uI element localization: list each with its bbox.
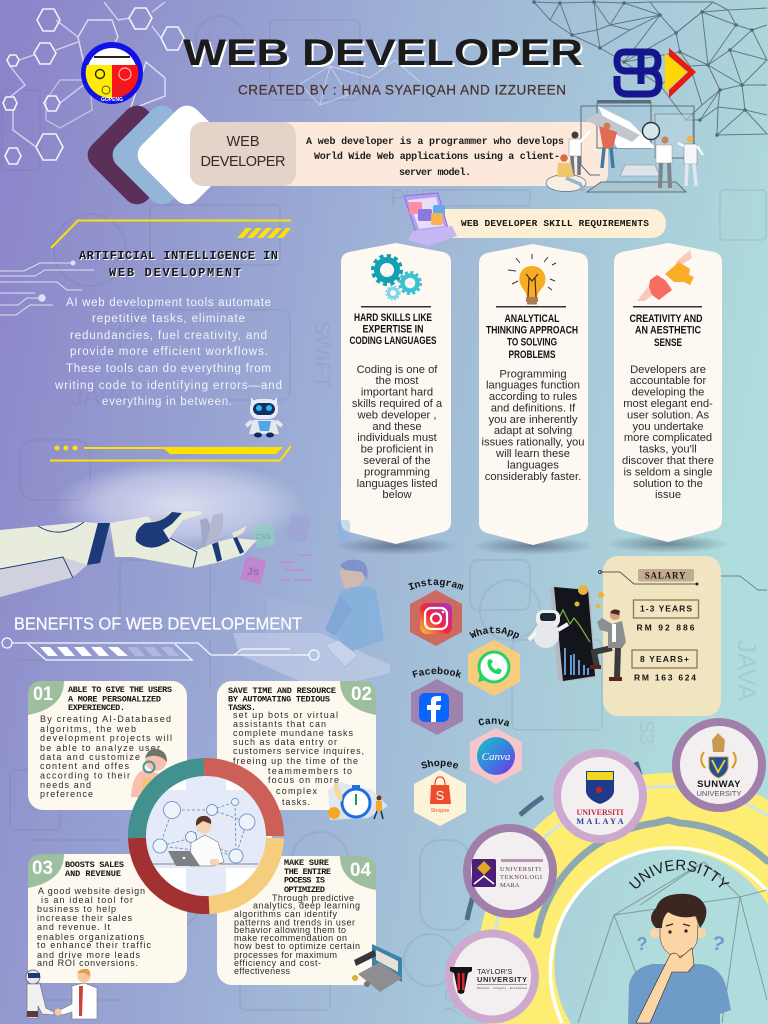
benefit body: according to their — [40, 770, 130, 780]
labels: social platforms — [408, 578, 519, 768]
benefit heading: MAKE SURE — [284, 858, 329, 868]
heading — [79, 249, 279, 281]
benefit body: business to help — [37, 904, 116, 914]
badge: sunway university: SUNWAY — [697, 779, 741, 790]
decoration: benefits tech underline — [2, 638, 319, 660]
icon: shopee hexagon: Shopee — [431, 808, 449, 814]
illustration: team building website — [546, 100, 703, 192]
benefit body: set up bots or virtual — [233, 710, 338, 720]
benefit body: behavior allowing them to — [234, 925, 346, 935]
body text: AI web development tools automate — [66, 297, 271, 309]
benefit body: freeing up the time of the — [233, 756, 358, 766]
icon: whatsapp hexagon — [468, 640, 520, 696]
body text: redundancies, fuel creativity, and — [70, 330, 267, 342]
heading box: WEB — [226, 134, 260, 150]
labels: social platforms: Canva — [478, 718, 509, 726]
icon: js tile — [240, 556, 267, 584]
benefit body: customers service inquires, — [233, 746, 364, 756]
logo: school crest: GOPENG — [101, 97, 123, 103]
heading: ARTIFICIAL INTELLIGENCE IN — [80, 250, 279, 264]
card body: languages listed — [357, 478, 437, 490]
icon: css tile: CSS — [255, 532, 271, 541]
card body: the most — [376, 375, 419, 387]
benefit body: teammembers to — [268, 766, 352, 776]
badge: universiti malaya: UNIVERSITI — [576, 808, 624, 817]
chart: university rings — [467, 762, 768, 1024]
labels: social platforms: Facebook — [412, 666, 462, 678]
illustration: developer at desk — [233, 514, 390, 690]
card body: programming — [364, 466, 430, 478]
body text: writing code to identifying errors—and — [54, 380, 282, 392]
benefit body: data and customize — [40, 752, 140, 762]
benefit body: increase their sales — [37, 913, 132, 923]
decoration: network mesh top right — [534, 2, 767, 135]
logo: SB with arrow — [617, 48, 696, 98]
labels: social platforms: Shopee — [421, 760, 458, 768]
number badge 01 — [28, 681, 64, 715]
benefit body: algoritms, the web — [40, 724, 136, 734]
number badge 04: 04 — [350, 860, 371, 881]
panel: benefit 03 — [26, 854, 187, 1019]
badge: universiti teknologi mara: MARA — [500, 882, 520, 889]
card heading: AN AESTHETIC — [635, 324, 701, 336]
salary row 2: 8 YEARS+ — [640, 654, 689, 664]
body text — [54, 297, 282, 408]
icon: js tile: Js — [247, 566, 259, 578]
card body: adapt at solving — [494, 425, 572, 437]
icon: gears — [373, 256, 420, 300]
badge: universiti teknologi mara: UNIVERSITI — [500, 866, 541, 873]
card body: issue — [655, 489, 681, 501]
benefit body: be able to analyze user — [40, 743, 160, 753]
heading box — [190, 122, 296, 186]
benefit heading — [228, 686, 336, 713]
card body: is seldom a single — [624, 466, 712, 478]
benefit body: needs and — [40, 780, 91, 790]
card body — [481, 368, 585, 483]
benefit heading — [68, 685, 172, 713]
icon: stacked diamonds — [82, 100, 242, 210]
card body: tasks, you'll — [639, 444, 697, 456]
number badge 04 — [340, 856, 376, 890]
card body: Coding is one of — [357, 364, 438, 376]
card body: be proficient in — [361, 444, 433, 456]
heading: WEB DEVELOPMENT — [110, 267, 242, 281]
panel: intro banner — [82, 100, 608, 210]
icon: shopee hexagon: S — [436, 788, 445, 803]
card body: more complicated — [624, 432, 712, 444]
body text: everything in between. — [102, 396, 232, 408]
tech bubbles — [153, 798, 255, 863]
ring segments — [137, 767, 275, 905]
benefit body: and drive more leads — [37, 950, 140, 960]
card heading: CREATIVITY AND — [630, 313, 703, 325]
panel: salary — [598, 556, 767, 716]
benefit body: A good website design — [38, 886, 145, 896]
number badge 03 — [28, 854, 64, 888]
badge: taylor's university: Wisdom · Integrity · Excellence — [477, 986, 527, 990]
badge: universiti malaya: MALAYA — [576, 817, 624, 826]
benefit body — [40, 714, 172, 799]
benefit heading: POCESS IS — [284, 876, 325, 886]
card body: languages — [507, 460, 559, 472]
card body: several of the — [363, 455, 431, 467]
description — [306, 136, 564, 179]
badge: sunway university — [676, 722, 762, 808]
card body: according to rules — [489, 391, 578, 403]
benefit body: such as data entry or — [233, 737, 337, 747]
benefit body: algorithms can identify — [234, 909, 338, 919]
card body: Developers are — [630, 364, 706, 376]
card body: discover that there — [622, 455, 714, 467]
heading: WEB DEVELOPMENT — [109, 266, 241, 280]
badge: taylor's university — [449, 934, 535, 1020]
benefit body: assistants that can — [233, 719, 326, 729]
card body: will learn these — [495, 448, 570, 460]
card heading — [486, 313, 578, 361]
card heading: HARD SKILLS LIKE — [354, 312, 432, 324]
benefit body: and ROI conversions. — [37, 958, 138, 968]
number badge 03: 03 — [32, 858, 53, 879]
label: university curved: UNIVERSITTY — [628, 860, 730, 888]
card body: Programming — [499, 368, 567, 380]
benefit body — [37, 886, 152, 968]
card body: and these — [372, 421, 422, 433]
icon: puzzle pieces — [637, 250, 694, 301]
badge: taylor's university: TAYLOR'S — [477, 967, 512, 976]
card body: issues rationally, you — [481, 436, 585, 448]
benefit body: development projects will — [40, 733, 172, 743]
logo: school crest — [81, 42, 143, 104]
card body: and definitions. If — [491, 402, 576, 414]
card body: individuals must — [357, 432, 438, 444]
card body: you are inherently — [489, 414, 578, 426]
benefit body: content and offes — [40, 761, 130, 771]
yellow frame bottom — [50, 446, 291, 460]
number badge 02: 02 — [351, 684, 372, 705]
card heading — [350, 312, 436, 347]
skill requirements pill: WEB DEVELOPER SKILL REQUIREMENTS — [461, 218, 649, 229]
figure: man in lab coat — [678, 136, 703, 186]
heading: ARTIFICIAL INTELLIGENCE IN — [79, 249, 278, 263]
description: A web developer is a programmer who develops — [306, 136, 564, 148]
subtitle: authors: CREATED BY : HANA SYAFIQAH AND IZZUREEN — [238, 82, 566, 98]
card body: user solution. As — [627, 410, 709, 422]
benefit heading: A MORE PERSONALIZED — [68, 694, 161, 704]
benefit body: analytics, deep learning — [253, 900, 360, 910]
benefit body: is an ideal tool for — [41, 895, 133, 905]
salary row 1: RM 92 886 — [636, 622, 695, 632]
card heading: EXPERTISE IN — [362, 324, 424, 336]
benefit heading: AND REVENUE — [65, 869, 121, 879]
icon: instagram hexagon — [410, 590, 462, 646]
benefit heading: BOOSTS SALES — [65, 860, 124, 870]
panel: benefit 01 — [28, 681, 187, 810]
card heading: ANALYTICAL — [504, 313, 560, 325]
card heading: SENSE — [654, 337, 682, 349]
number badge 01: 01 — [33, 684, 53, 705]
card body: skills required of a — [352, 398, 443, 410]
description: World Wide Web applications using a client- — [314, 151, 560, 163]
labels: social platforms: WhatsApp — [469, 626, 519, 640]
decoration: mesh in circle — [578, 862, 767, 1023]
panel: benefit 02 — [217, 681, 388, 820]
benefit heading: EXPERIENCED. — [68, 703, 125, 713]
body text: These tools can do everything from — [66, 363, 271, 375]
title: WEB DEVELOPER — [185, 34, 585, 75]
benefit body — [234, 893, 360, 976]
number badge 02 — [340, 681, 376, 715]
figure: woman in red — [599, 122, 617, 168]
benefit heading: BY AUTOMATING TEDIOUS — [228, 694, 330, 704]
panel: artificial intelligence — [50, 220, 291, 460]
benefit heading: THE ENTIRE — [284, 867, 331, 877]
icon: shopee hexagon — [414, 770, 466, 826]
background watermark icons: JAVA — [70, 381, 132, 411]
body text: provide more efficient workflows. — [70, 346, 268, 358]
benefit heading: TASKS. — [228, 703, 256, 713]
card body: below — [382, 489, 413, 501]
background watermark icons: JAVA — [732, 640, 762, 702]
benefit body: preference — [40, 789, 93, 799]
card body: web developer , — [356, 410, 436, 422]
benefit body: enables organizations — [37, 932, 144, 942]
icon: isometric laptop and router — [352, 944, 402, 992]
card heading: PROBLEMS — [508, 349, 556, 361]
description: server model. — [399, 167, 471, 179]
illustration: robot arm — [0, 511, 257, 597]
illustration: thinking man: ? — [710, 932, 727, 956]
robot — [529, 610, 568, 648]
card body: considerably faster. — [485, 471, 581, 483]
card heading — [630, 313, 703, 349]
decoration: glow behind hand — [55, 460, 305, 550]
icon: canva hexagon — [470, 728, 522, 784]
mesh nodes — [532, 0, 754, 137]
banner body — [190, 122, 608, 186]
badge: universiti malaya — [557, 753, 643, 839]
badge: universiti teknologi mara: TEKNOLOGI — [500, 874, 542, 881]
icon: canva hexagon: Canva — [482, 751, 511, 763]
benefit body: complete mundane tasks — [233, 728, 354, 738]
labels: social platforms: Instagram — [408, 578, 464, 590]
background watermark icons: PHP — [390, 185, 435, 210]
figure: man with raised arm — [569, 131, 590, 175]
illustration: thinking man — [628, 894, 731, 1024]
card body: languages function — [486, 380, 580, 392]
benefit body: how best to optimize certain — [234, 941, 360, 951]
title: WEB DEVELOPER — [183, 32, 583, 73]
body text: repetitive tasks, eliminate — [92, 313, 245, 325]
illustration: thinking man: ? — [636, 934, 648, 954]
background watermark icons: RUBY — [440, 960, 462, 1016]
benefit body: focus on more — [268, 775, 339, 785]
benefit body: efficiency and cost- — [234, 958, 321, 968]
card body — [352, 364, 443, 501]
salary heading — [638, 569, 694, 582]
icon: stopwatch with coins — [328, 782, 388, 820]
chart: centre ring with developer — [137, 767, 275, 905]
benefit heading: OPTIMIZED — [284, 885, 325, 895]
benefit heading — [65, 860, 124, 879]
salary row 2 — [632, 650, 697, 682]
faint triangle mesh under title — [300, 60, 420, 105]
decoration: circuit lines left — [0, 261, 94, 315]
icon: small robot — [246, 397, 282, 438]
benefit heading — [284, 858, 331, 895]
salary row 2: RM 163 624 — [634, 672, 696, 682]
card heading: TO SOLVING — [507, 336, 557, 348]
badge: sunway university: UNIVERSITY — [696, 789, 742, 798]
benefit body — [233, 710, 364, 807]
card body: you undertake — [633, 421, 703, 433]
salary row 1 — [634, 600, 698, 632]
panel: creativity — [606, 243, 730, 553]
benefit body: and revenue. It — [37, 922, 110, 932]
benefit heading: SAVE TIME AND RESOURCE — [228, 686, 336, 696]
icon: facebook hexagon — [411, 679, 463, 735]
figure: seated woman — [546, 154, 586, 192]
benefit body: processes for maximum — [234, 950, 337, 960]
benefit heading: ABLE TO GIVE THE USERS — [68, 685, 172, 695]
card heading: THINKING APPROACH — [486, 324, 578, 336]
panel: hard skills — [334, 243, 458, 555]
illustration: phone, robot and businessman — [529, 585, 626, 682]
card body: solution to the — [633, 478, 703, 490]
card body: important hard — [361, 386, 433, 398]
benefit body: Through predictive — [272, 893, 354, 903]
icon: light bulb — [508, 254, 556, 304]
benefit body: to enhance their traffic — [37, 940, 152, 950]
yellow frame top — [51, 220, 291, 248]
benefit body: make recommendation on — [234, 933, 347, 943]
developer figure — [152, 816, 258, 866]
background watermark icons: SWIFT — [310, 320, 335, 388]
card body: most elegant end- — [623, 398, 713, 410]
figure: man with phone — [656, 136, 672, 188]
benefit body: tasks. — [282, 797, 310, 807]
benefit body: By creating AI-Databased — [40, 714, 171, 724]
heading box: DEVELOPER — [200, 154, 286, 170]
badge: universiti teknologi mara — [467, 828, 553, 914]
heading: benefits: BENEFITS OF WEB DEVELOPEMENT — [14, 614, 302, 634]
panel: analytical thinking — [471, 244, 595, 555]
icon: child with magnifier — [131, 749, 168, 798]
panel: benefit 04 — [217, 856, 402, 992]
icon: purple laptop — [404, 193, 457, 246]
badge: taylor's university: UNIVERSITY — [477, 975, 527, 984]
benefit body: effectiveness — [234, 966, 290, 976]
businessman — [590, 609, 626, 681]
card body: accountable for — [630, 375, 707, 387]
card body — [622, 364, 714, 501]
card heading: CODING LANGUAGES — [350, 335, 436, 347]
salary heading: SALARY — [645, 570, 686, 580]
icon: css tile — [252, 522, 276, 549]
background watermark icons: S3 — [635, 720, 657, 744]
benefit body: complex — [276, 786, 318, 796]
icon: robot and man handshake — [26, 969, 97, 1019]
card body: developing the — [632, 386, 704, 398]
benefit body: patterns and trends in user — [234, 918, 355, 928]
skill requirements pill — [430, 209, 666, 238]
salary row 1: 1-3 YEARS — [640, 604, 692, 614]
decoration: molecule hexagons — [3, 2, 184, 164]
